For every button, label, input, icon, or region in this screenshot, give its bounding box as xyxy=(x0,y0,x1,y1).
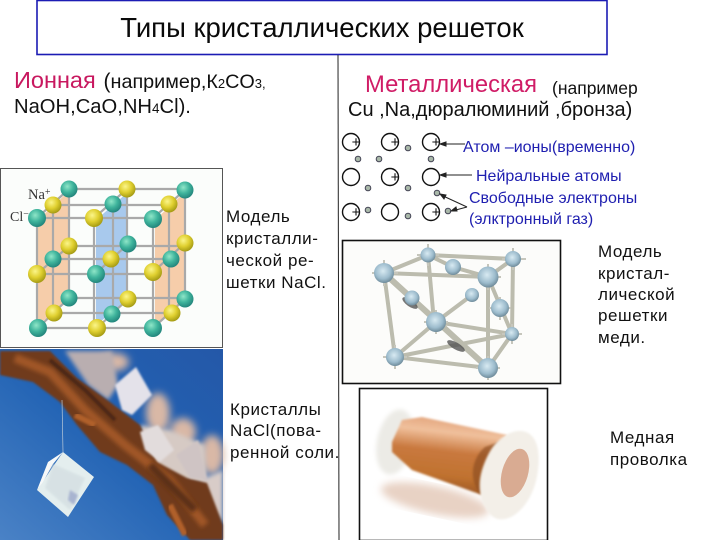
copper coil xyxy=(392,417,507,495)
labels xyxy=(463,139,637,228)
hanging salt cube xyxy=(37,452,94,517)
caption: NaCl model: шетки NaCl. xyxy=(226,273,327,292)
middle atoms xyxy=(44,196,180,322)
left flange xyxy=(371,406,419,478)
front atoms xyxy=(28,209,162,337)
caption: copper model: кристал- xyxy=(598,264,670,283)
caption: salt crystals xyxy=(230,400,340,462)
shadow xyxy=(378,475,492,525)
labels: Атом –ионы(временно) xyxy=(463,139,635,156)
coil winding shade xyxy=(473,440,505,494)
caption: salt crystals: Кристаллы xyxy=(230,400,321,419)
title: Типы кристаллических решеток xyxy=(120,12,525,43)
metal lattice schematic: + xyxy=(352,204,361,221)
metal lattice schematic: + xyxy=(391,134,400,151)
caption: NaCl model: ческой ре- xyxy=(226,251,314,270)
heading: metallic lattice: Металлическая xyxy=(365,71,537,98)
ion labels: + xyxy=(45,187,51,198)
salt crystal photo xyxy=(0,349,224,540)
metal lattice schematic: + xyxy=(432,134,441,151)
labels: Свободные электроны xyxy=(469,190,637,207)
caption: salt crystals: ренной соли. xyxy=(230,443,340,462)
title xyxy=(37,0,607,54)
copper atoms xyxy=(374,248,521,378)
labels: (элктронный газ) xyxy=(469,211,593,228)
caption: copper wire xyxy=(610,428,688,469)
caption: copper wire: Медная xyxy=(610,428,675,447)
caption: NaCl model xyxy=(226,207,327,292)
caption: copper wire: проволка xyxy=(610,450,688,469)
lattice bars xyxy=(37,189,185,328)
brown branch xyxy=(0,351,223,540)
divider line between columns xyxy=(338,55,339,540)
arrows xyxy=(440,142,472,211)
free electrons xyxy=(355,145,451,219)
heading: ionic lattice: NaOH,CaO,NH4Cl). xyxy=(14,96,191,118)
right flange xyxy=(480,431,539,519)
caption: copper model: лической xyxy=(598,285,675,304)
metal lattice schematic xyxy=(342,134,637,228)
coloured planes xyxy=(38,190,185,325)
caption: NaCl model: кристалли- xyxy=(226,229,318,248)
metal lattice schematic: + xyxy=(432,204,441,221)
heading: ionic lattice: Ионная (например,К2CO3, xyxy=(14,67,266,93)
caption: salt crystals: NaCl(пова- xyxy=(230,421,322,440)
NaCl lattice model image: − xyxy=(23,209,29,220)
flange hole xyxy=(496,445,534,501)
caption: copper model xyxy=(598,242,675,347)
ion labels: Na xyxy=(28,187,45,203)
dark holders xyxy=(401,295,466,354)
caption: copper model: решетки xyxy=(598,306,668,325)
caption: NaCl model: Модель xyxy=(226,207,290,226)
labels: Нейральные атомы xyxy=(476,168,622,185)
metal lattice schematic: + xyxy=(352,134,361,151)
caption: copper model: Модель xyxy=(598,242,662,261)
heading: metallic lattice xyxy=(348,71,638,121)
lattice rods xyxy=(384,255,513,368)
metal lattice schematic: + xyxy=(391,169,400,186)
positive ions and neutral atoms xyxy=(342,134,440,220)
pale crystals on branch xyxy=(65,351,118,400)
copper lattice model image xyxy=(342,240,560,384)
back atoms xyxy=(60,180,194,308)
heading: metallic lattice: Cu ,Na,дюралюминий ,бронза) xyxy=(348,99,632,121)
heading: ionic lattice xyxy=(14,67,266,118)
atom spikes xyxy=(372,244,526,380)
white crystals xyxy=(115,367,152,415)
NaCl lattice model image xyxy=(0,168,222,348)
caption: copper model: меди. xyxy=(598,328,646,347)
NaCl lattice model image: Cl xyxy=(10,210,23,225)
hanging thread xyxy=(62,400,63,452)
copper wire spool photo xyxy=(360,388,548,540)
heading: metallic lattice: (например xyxy=(552,78,638,98)
peach blurred crystals behind xyxy=(101,353,224,475)
